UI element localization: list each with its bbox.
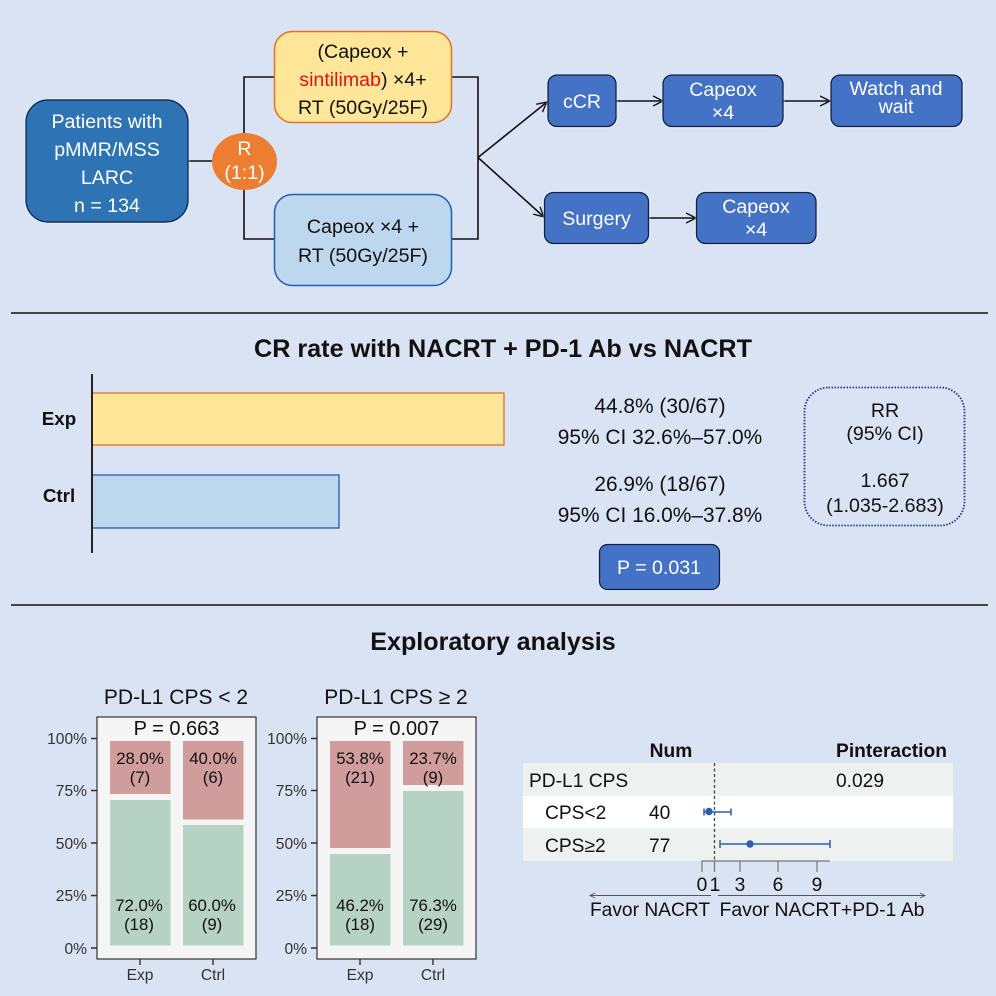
text: CR results: 95% CI 16.0%–37.8% [558, 504, 762, 527]
box: cCR: cCR [563, 91, 601, 113]
text: CR results: 44.8% (30/67) [594, 395, 726, 418]
forest plot: 77 [649, 836, 670, 857]
forest plot: 0 [697, 875, 707, 896]
forest plot: Favor NACRT [590, 900, 710, 921]
box: Capeox x4 upper: ×4 [712, 102, 734, 124]
P value badge: P = 0.031 [617, 557, 701, 579]
box: control arm [274, 194, 452, 286]
randomization circle: R [237, 138, 252, 160]
box: Capeox x4 lower: ×4 [745, 219, 767, 241]
callout: relative risk: 1.667 [860, 470, 910, 492]
forest plot: Pinteraction [836, 741, 947, 762]
text: CR results [558, 395, 762, 527]
stacked chart: CPS 2 or above [267, 686, 476, 984]
forest plot: 1 [710, 875, 720, 896]
forest plot: 9 [812, 875, 822, 896]
stacked chart: CPS 2 or above: 46.2% [336, 896, 384, 915]
stacked chart: CPS below 2: 40.0% [189, 749, 237, 768]
stacked chart: CPS 2 or above: 76.3% [409, 896, 457, 915]
stacked chart: CPS 2 or above: Ctrl [421, 967, 445, 984]
stacked chart: CPS below 2: Ctrl [201, 967, 225, 984]
forest plot: PD-L1 CPS [529, 771, 628, 792]
stacked chart: CPS below 2: P = 0.663 [134, 718, 219, 740]
stacked chart: CPS below 2: 75% [56, 783, 87, 800]
stacked chart: CPS below 2: (6) [203, 768, 223, 787]
stacked chart: CPS below 2: 100% [47, 731, 87, 748]
bar chart: CR rate: Ctrl [43, 485, 75, 506]
stacked chart: CPS below 2: 50% [56, 836, 87, 853]
box: patients: pMMR/MSS [54, 139, 160, 161]
stacked chart: CPS 2 or above: (18) [345, 915, 375, 934]
box: experimental arm: RT (50Gy/25F) [298, 97, 428, 119]
box: control arm: Capeox ×4 + [307, 216, 419, 238]
box: Capeox x4 lower: Capeox [722, 196, 790, 218]
bar chart: CR rate: Exp [42, 408, 76, 429]
stacked chart: CPS 2 or above: P = 0.007 [354, 718, 439, 740]
stacked chart: CPS below 2: (9) [202, 915, 222, 934]
box: patients: LARC [81, 167, 133, 189]
callout: relative risk: RR [871, 400, 899, 422]
box: patients: Patients with [51, 111, 163, 133]
forest plot [523, 741, 953, 921]
forest plot: Num [650, 741, 692, 762]
stacked chart: CPS below 2: Exp [127, 967, 154, 984]
box: patients: n = 134 [74, 195, 140, 217]
forest plot: CPS<2 [545, 803, 606, 824]
box: patients [26, 100, 188, 222]
stacked chart: CPS 2 or above: 75% [276, 783, 307, 800]
stacked chart: CPS 2 or above: (9) [423, 768, 443, 787]
stacked chart: CPS below 2: PD-L1 CPS < 2 [104, 686, 248, 709]
forest plot: Favor NACRT+PD-1 Ab [720, 899, 924, 921]
stacked chart: CPS 2 or above: (29) [418, 915, 448, 934]
box: Capeox x4 lower [696, 192, 816, 244]
flow connectors [187, 77, 830, 239]
P value badge [600, 544, 720, 590]
box: experimental arm: sintilimab) ×4+ [299, 69, 427, 91]
stacked chart: CPS below 2: 60.0% [188, 896, 236, 915]
callout: relative risk: (95% CI) [846, 423, 924, 445]
box: experimental arm [274, 32, 452, 122]
stacked chart: CPS 2 or above: 50% [276, 836, 307, 853]
stacked chart: CPS 2 or above: 100% [267, 731, 307, 748]
box: watch and wait: wait [878, 96, 914, 118]
bar chart: CR rate [42, 374, 504, 553]
box: watch and wait: Watch and [850, 78, 942, 100]
stacked chart: CPS 2 or above: PD-L1 CPS ≥ 2 [324, 686, 468, 709]
text: CR results: 95% CI 32.6%–57.0% [558, 426, 762, 449]
callout: relative risk: (1.035-2.683) [826, 495, 944, 517]
stacked chart: CPS 2 or above: Exp [347, 967, 374, 984]
stacked chart: CPS below 2: 72.0% [115, 896, 163, 915]
stacked chart: CPS below 2: 28.0% [116, 749, 164, 768]
stacked chart: CPS below 2 [47, 686, 256, 984]
callout: relative risk [804, 388, 964, 526]
randomization circle: (1:1) [224, 162, 265, 184]
stacked chart: CPS below 2: (18) [124, 915, 154, 934]
stacked chart: CPS 2 or above: 25% [276, 888, 307, 905]
randomization circle [212, 133, 277, 190]
box: Capeox x4 upper: Capeox [689, 79, 757, 101]
box: surgery: Surgery [562, 208, 631, 230]
stacked chart: CPS 2 or above: 23.7% [409, 749, 457, 768]
box: cCR [548, 75, 616, 126]
stacked chart: CPS 2 or above: 53.8% [336, 749, 384, 768]
stacked chart: CPS below 2: (7) [130, 768, 150, 787]
forest plot: 0.029 [836, 771, 884, 792]
forest plot: 40 [649, 803, 670, 824]
box: Capeox x4 upper [663, 75, 783, 126]
stacked chart: CPS 2 or above: (21) [345, 768, 375, 787]
text: CR results: 26.9% (18/67) [594, 473, 726, 496]
forest plot: 3 [735, 875, 745, 896]
heading: exploratory: Exploratory analysis [370, 628, 616, 656]
box: surgery [544, 192, 648, 244]
forest plot: CPS≥2 [545, 836, 606, 857]
stacked chart: CPS below 2: 0% [64, 941, 87, 958]
forest plot: 6 [773, 875, 783, 896]
box: experimental arm: (Capeox + [318, 41, 408, 63]
stacked chart: CPS below 2: 25% [56, 888, 87, 905]
stacked chart: CPS 2 or above: 0% [284, 941, 307, 958]
box: control arm: RT (50Gy/25F) [298, 245, 428, 267]
box: watch and wait [831, 75, 962, 126]
heading: CR rate: CR rate with NACRT + PD-1 Ab vs NACRT [254, 335, 753, 363]
